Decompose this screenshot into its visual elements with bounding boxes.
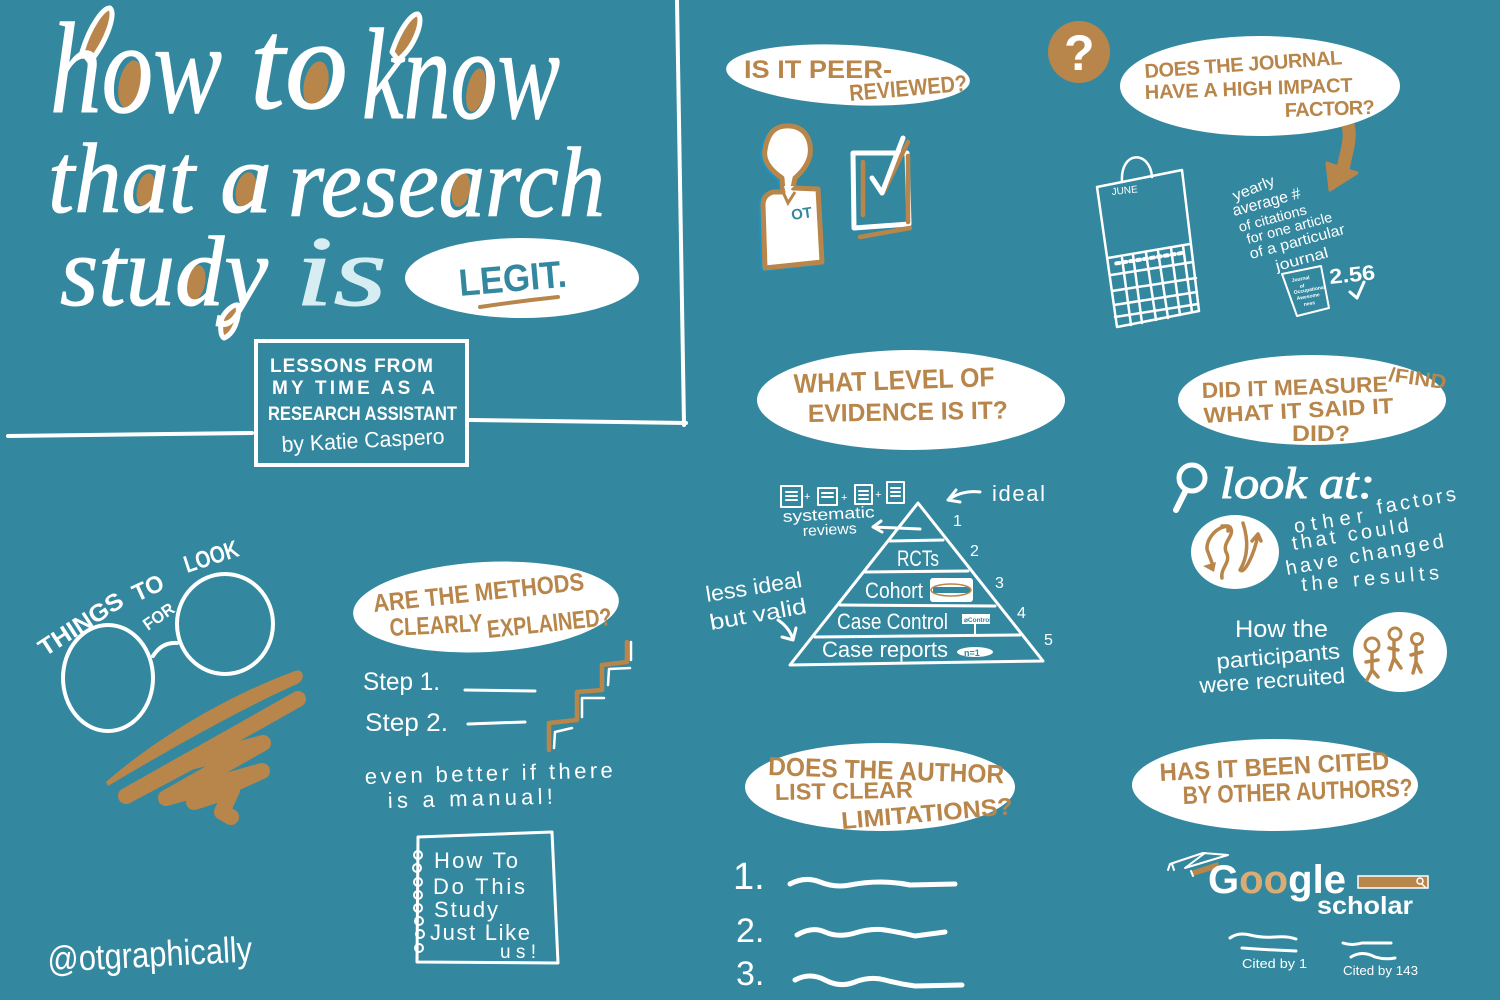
pyramid level numbers: 5 [1044, 632, 1053, 649]
heading: is it peer-reviewed: IS IT PEER- [744, 56, 892, 84]
pyramid level numbers: 1 [953, 513, 962, 530]
heading: things to look for: THINGS [34, 587, 129, 662]
text: impact factor definition: of citations [1237, 201, 1308, 235]
logo: google scholar [1208, 858, 1428, 920]
heading: are the methods clearly explained [351, 555, 621, 659]
heading: did it measure: DID? [1292, 421, 1350, 446]
text: even better if there is a manual: even better if there [364, 758, 613, 789]
pyramid level numbers: 4 [1017, 605, 1026, 622]
arrow: brown [1327, 125, 1357, 190]
text: even better if there is a manual [364, 758, 613, 813]
text: look at: look at: [1220, 459, 1375, 508]
control sign [962, 614, 991, 634]
title accent fills [114, 58, 489, 302]
badge: legit [405, 238, 639, 318]
heading: did it measure: DID IT MEASURE [1201, 372, 1388, 403]
heading: things to look for: TO [128, 569, 169, 607]
title: that [48, 123, 197, 234]
pyramid labels: Cohort [865, 578, 923, 603]
icon: graduation cap [1168, 853, 1228, 876]
heading: level of evidence: WHAT LEVEL OF [793, 362, 995, 399]
limitations list [733, 856, 962, 993]
heading: is it peer-reviewed [725, 39, 971, 111]
text: other factors [1284, 483, 1458, 596]
heading: limitations: DOES THE AUTHOR [768, 751, 1005, 789]
icon: question badge: ? [1064, 25, 1095, 81]
icon: glasses [63, 574, 273, 731]
text: impact factor definition: of a particular [1248, 221, 1347, 263]
heading: things to look for: FOR [139, 599, 178, 634]
cohort chip [930, 578, 973, 602]
subtitle box: by Katie Caspero [281, 423, 445, 457]
text: other factors: that could [1290, 515, 1410, 555]
icon: calendar [1097, 157, 1199, 327]
icon: question badge [1048, 21, 1110, 83]
heading: limitations: LIMITATIONS? [840, 793, 1014, 835]
text: participants: were recruited [1198, 663, 1346, 698]
icon: systematic review documents: + [804, 491, 810, 503]
icon: manual notebook: Do This [433, 874, 525, 899]
pyramid labels: Case reports [822, 637, 948, 662]
limitations list: 2. [736, 912, 764, 950]
subtitle box: LESSONS FROM [270, 356, 433, 377]
icon: manual notebook: Just Like [430, 920, 530, 945]
icon: brown scribble [106, 671, 303, 817]
limitations list: 3. [736, 955, 764, 993]
text: impact factor definition: for one article [1245, 209, 1334, 247]
icon: systematic review documents: systematic [782, 504, 875, 526]
text: impact factor definition: journal [1272, 244, 1330, 275]
icon: journal with score: of [1299, 283, 1305, 290]
icon: person: OT [790, 204, 813, 224]
heading: are the methods clearly explained: EXPLAINED? [486, 603, 613, 644]
annotation: less ideal but valid: but valid [708, 593, 808, 635]
text: other factors: other [1292, 505, 1365, 538]
methods steps [363, 668, 535, 737]
heading: level of evidence: EVIDENCE IS IT? [808, 397, 1008, 428]
icon: journal with score: Awesome [1296, 292, 1320, 302]
title: study [60, 216, 269, 327]
icon: systematic review documents [781, 482, 920, 540]
text: even better if there is a manual: is a manual! [387, 784, 553, 813]
heading: did it measure: /FIND [1387, 364, 1448, 394]
title [48, 0, 605, 338]
annotation: ideal [948, 481, 1045, 506]
pyramid labels: Case Control [837, 609, 948, 634]
icon: manual notebook: us! [500, 942, 536, 963]
text: other factors: factors [1375, 483, 1458, 519]
heading: cited by others: BY OTHER AUTHORS? [1182, 774, 1413, 810]
pyramid labels: RCTs [897, 546, 939, 571]
icon: magnifying glass [1176, 465, 1205, 510]
heading: limitations: LIST CLEAR [775, 777, 913, 805]
title: a [220, 123, 272, 234]
pyramid level numbers: 3 [995, 575, 1004, 592]
subtitle box: MY TIME AS A [272, 378, 435, 399]
text: impact factor definition: average # [1231, 185, 1303, 220]
control sign: ⌀Control [964, 617, 991, 624]
heading: high impact factor: HAVE A HIGH IMPACT [1144, 75, 1353, 104]
icon: journal with score [1282, 261, 1376, 316]
icon: manual notebook: Study [434, 897, 498, 922]
heading: things to look for: LOOK [181, 536, 243, 579]
title: know [362, 3, 560, 147]
search results: Cited by 1 [1242, 956, 1307, 971]
heading: cited by others: HAS IT BEEN CITED [1159, 747, 1390, 787]
heading: are the methods clearly explained: ARE THE METHODS [372, 568, 585, 618]
badge: legit: LEGIT. [457, 254, 568, 305]
handle: @otgraphically [46, 928, 253, 980]
heading: high impact factor: DOES THE JOURNAL [1144, 47, 1343, 83]
icon: stairs [549, 642, 631, 750]
text: participants [1198, 616, 1346, 698]
n=1 pill [957, 647, 993, 658]
search results: Cited by 143 [1343, 963, 1418, 978]
heading: cited by others [1132, 739, 1418, 831]
pyramid level numbers: 2 [970, 543, 979, 560]
text: impact factor definition [1230, 172, 1347, 275]
subtitle box: RESEARCH ASSISTANT [268, 404, 457, 425]
heading: level of evidence [757, 350, 1065, 450]
annotation: ideal: ideal [992, 481, 1045, 506]
annotation: less ideal but valid [704, 567, 808, 640]
title: research [288, 127, 605, 238]
icon: calendar: JUNE [1111, 184, 1139, 198]
icon: manual notebook [413, 832, 558, 963]
heading: high impact factor [1120, 36, 1400, 136]
text: impact factor definition: yearly [1230, 172, 1278, 205]
title ascender loops [82, 8, 420, 338]
icon: confounding arrows [1191, 515, 1279, 589]
n=1 pill: n=1 [964, 648, 980, 658]
heading: did it measure [1178, 355, 1448, 446]
heading: did it measure: WHAT IT SAID IT [1203, 393, 1395, 428]
methods steps: Step 2. [365, 709, 448, 737]
icon: systematic review documents: reviews [802, 520, 857, 540]
limitations list: 1. [733, 856, 765, 898]
methods steps: Step 1. [363, 668, 440, 696]
text: participants: participants [1215, 638, 1341, 674]
subtitle box [256, 341, 467, 465]
icon: checkbox [853, 138, 910, 237]
heading: things to look for [34, 536, 243, 662]
icon: systematic review documents: + [841, 492, 847, 504]
heading: is it peer-reviewed: REVIEWED? [848, 70, 968, 106]
icon: systematic review documents: + [875, 489, 881, 501]
title: how [50, 0, 222, 141]
title: is [295, 216, 387, 327]
icon: journal with score: ness [1303, 300, 1316, 308]
heading: are the methods clearly explained: CLEARLY [389, 609, 483, 642]
icon: journal with score: Occupational [1293, 284, 1326, 296]
annotation: less ideal but valid: less ideal [704, 567, 804, 607]
chart: evidence pyramid [790, 503, 1053, 665]
heading: high impact factor: FACTOR? [1284, 97, 1375, 122]
text: participants: How the [1235, 616, 1328, 643]
icon: journal with score: 2.56 [1328, 261, 1376, 289]
icon: person [761, 126, 822, 269]
icon: manual notebook: How To [434, 848, 518, 873]
search results [1230, 934, 1418, 978]
icon: journal with score: Journal [1291, 275, 1311, 284]
heading: limitations [745, 743, 1015, 835]
icon: participants [1353, 612, 1447, 692]
text: other factors: the results [1301, 562, 1440, 596]
pyramid level numbers [953, 513, 1053, 649]
logo: google scholar: scholar [1317, 892, 1413, 920]
text: other factors: have changed [1284, 530, 1445, 580]
logo: google scholar: Google [1208, 858, 1346, 902]
pyramid labels [822, 546, 948, 662]
